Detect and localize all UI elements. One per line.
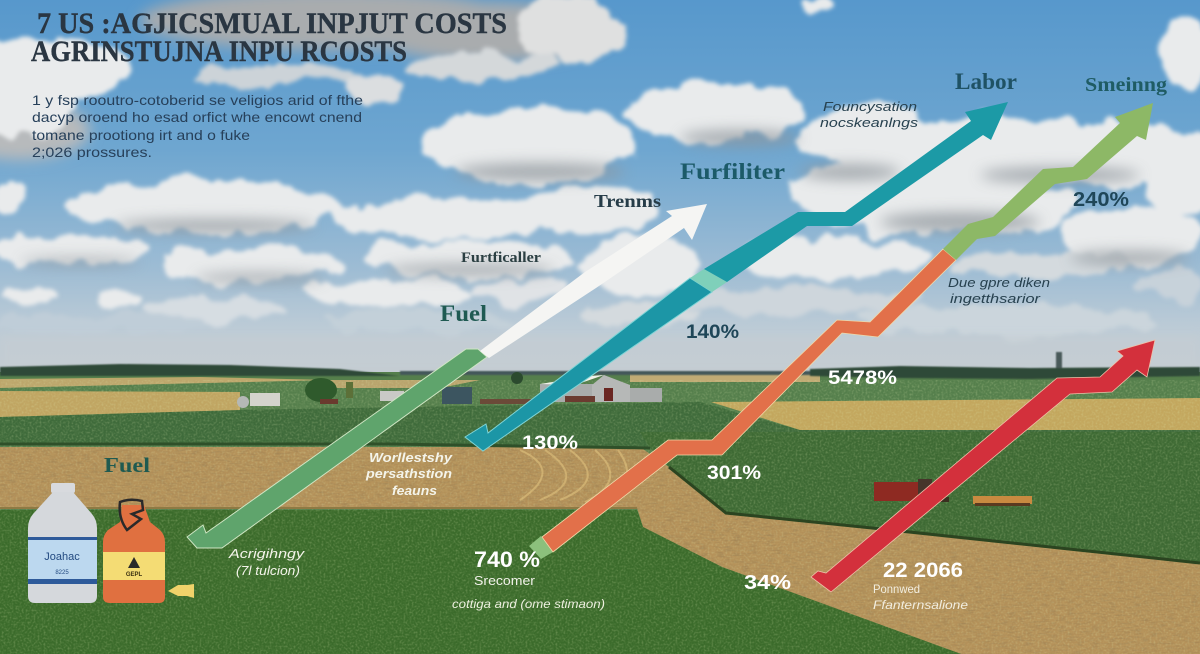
note: orange arrow: ingetthsarior [950,291,1041,306]
label: labor: Labor [955,69,1017,94]
note: worldwide [365,450,453,498]
value: 140 percent: 140% [686,322,739,343]
icon: white jug: 8225 [55,570,69,576]
title [31,7,507,68]
label: fuel lower: Fuel [104,453,150,477]
label: fuel upper: Fuel [440,301,487,326]
icon: small yellow fish [168,584,194,598]
note: labor arrow: nocskeanlngs [820,115,919,130]
note: worldwide: persathstion [365,466,452,481]
note: labor arrow [820,99,919,130]
intro text block: 2;026 prossures. [32,144,152,160]
note: bottom-left label [228,546,306,578]
label: trends: Trenms [594,191,661,211]
intro text block: dacyp oroend ho esad orfict whe encowt cnend [32,109,362,125]
value: 5478 percent: 5478% [828,368,897,389]
tree line on horizon [0,352,1200,379]
title: 7 US :AGJICSMUAL INPJUT COSTS [37,7,507,40]
farm buildings [237,372,662,408]
intro text block: 1 y fsp rooutro-cotoberid se veligios arid of fthe [32,92,363,108]
intro text block: tomane prootiong irt and o fuke [32,127,250,143]
value: 2026 with caption [873,559,968,612]
farmland landscape [0,372,1200,654]
icon: orange canister [103,500,165,603]
value: 240 percent: 240% [1073,189,1129,211]
note: orange arrow [948,275,1050,306]
note: bottom-left label: Acrigihngy [228,546,306,561]
value: 2026 with caption: 22 2066 [883,559,963,582]
label: fertilizer small: Furtficaller [461,250,541,266]
value: 2026 with caption: Ffanternsalione [873,598,968,612]
arrow: fuel green-white [187,204,707,548]
value: 740 percent with caption: 740 % [474,547,540,572]
value: 34 percent: 34% [744,572,791,594]
note: worldwide: Worllestshy [369,450,453,465]
sky background [0,0,1200,372]
icon: orange canister: GEPL [126,572,142,578]
arrow: red cost [811,340,1155,592]
value: 740 percent with caption [452,547,605,611]
note: orange arrow: Due gpre diken [948,275,1050,290]
note: bottom-left label: (7l tulcion) [236,563,300,578]
tractor and hay in right field [874,479,1032,506]
value: 130 percent: 130% [522,433,578,454]
value: 2026 with caption: Ponnwed [873,582,920,596]
icon: white jug: Joahac [44,551,80,563]
value: 301 percent: 301% [707,463,761,484]
intro text block [32,92,363,160]
arrow: seed orange-green [529,103,1153,559]
note: labor arrow: Founcysation [823,99,917,114]
icon: white jug [28,483,97,603]
value: 740 percent with caption: cottiga and (ome stimaon) [452,597,605,611]
note: worldwide: feauns [392,483,437,498]
value: 740 percent with caption: Srecomer [474,573,536,588]
arrow: fertilizer teal [465,102,1008,451]
title: AGRINSTUJNA INPU RCOSTS [31,35,407,68]
label: fertilizer: Furfiliter [680,159,785,184]
label: smeinng: Smeinng [1085,74,1167,96]
clouds [0,0,1200,372]
